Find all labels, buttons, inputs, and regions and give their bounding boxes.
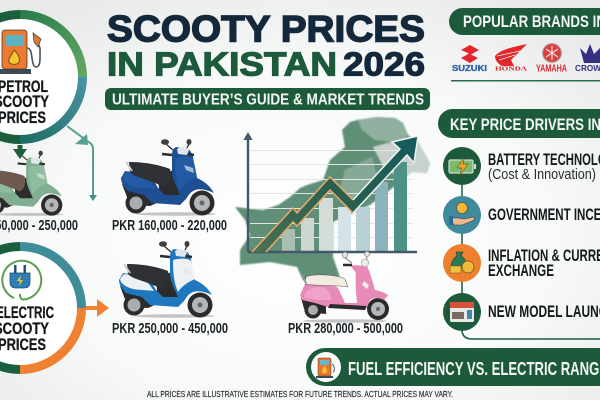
footer disclaimer: ALL PRICES ARE ILLUSTRATIVE ESTIMATES FOR FUTURE TRENDS. ACTUAL PRICES MAY VARY. <box>147 389 453 399</box>
scooter: pink <box>300 252 389 323</box>
title <box>107 8 425 82</box>
driver: inflation and currency exchange <box>443 244 600 282</box>
label: petrol scooty prices <box>0 78 49 127</box>
title: SCOOTY PRICES <box>107 8 425 50</box>
title: IN PAKISTAN <box>107 46 337 82</box>
logo: suzuki: SUZUKI <box>452 64 487 73</box>
ring <box>0 246 82 370</box>
logo: honda <box>495 44 527 72</box>
arrow: petrol down to green scooter <box>13 145 27 159</box>
label: petrol scooty prices: PETROL <box>0 78 48 96</box>
price: electric scooter: PKR 250,000 - 450,000 <box>112 321 228 337</box>
scooter: blue petrol <box>121 139 216 216</box>
driver: battery technology <box>443 147 600 185</box>
timeline line <box>462 185 600 339</box>
icon: hand with coin <box>443 196 481 234</box>
logo: yamaha: YAMAHA <box>536 64 567 74</box>
label: electric scooty prices <box>0 304 54 354</box>
icon: money bag and coins <box>443 244 481 282</box>
driver: inflation and currency exchange: EXCHANGE <box>488 262 554 280</box>
logo: yamaha <box>536 44 567 74</box>
logo: suzuki <box>452 45 487 73</box>
subtitle pill <box>105 88 430 110</box>
panel: brand logos <box>452 44 600 74</box>
logo: crown <box>575 44 600 73</box>
ring <box>0 14 82 140</box>
chart: map of Pakistan with rising price trend <box>235 117 430 280</box>
map of Pakistan <box>235 117 430 280</box>
bars <box>282 162 407 252</box>
banner: fuel efficiency vs electric range <box>306 348 600 386</box>
driver: government incentives <box>443 196 600 234</box>
icon: small fuel pump <box>316 358 334 378</box>
trend arrow <box>252 136 418 252</box>
axes <box>244 132 417 252</box>
logo: honda: HONDA <box>495 66 527 72</box>
arrow: electric to scooter <box>86 299 109 317</box>
scooter: green petrol <box>0 151 64 216</box>
price: pink scooter: PKR 280,000 - 500,000 <box>288 321 403 337</box>
icon: fuel pump <box>0 30 41 74</box>
title: 2026 <box>343 46 425 82</box>
icon: battery <box>443 147 481 185</box>
scooter: blue and white electric <box>119 241 214 318</box>
icon: electric plug <box>2 261 41 300</box>
icon: calendar <box>443 293 481 331</box>
panel: petrol scooty prices <box>0 14 82 140</box>
heading: key price drivers <box>438 109 600 138</box>
driver: new model launches <box>443 293 600 331</box>
panel: electric scooty prices <box>0 246 82 370</box>
price: blue scooter: PKR 160,000 - 220,000 <box>112 218 227 234</box>
subtitle pill: ULTIMATE BUYER’S GUIDE & MARKET TRENDS <box>112 92 424 108</box>
arrow: petrol to blue scooter <box>67 126 97 201</box>
heading: popular brands <box>449 8 600 35</box>
